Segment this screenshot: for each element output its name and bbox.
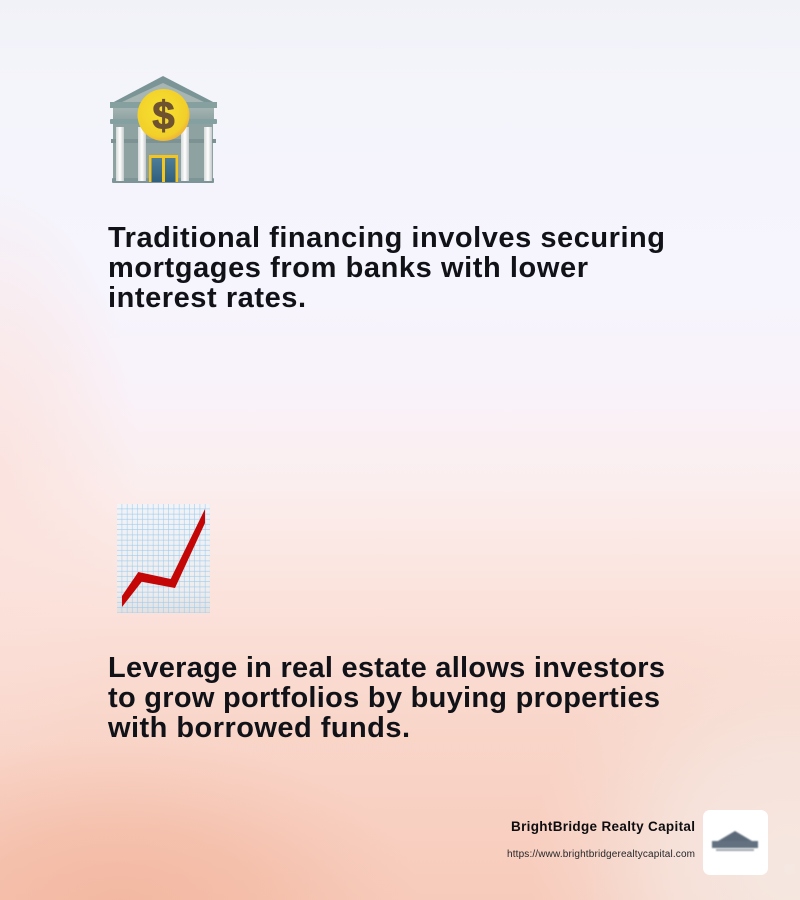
company url: https://www.brightbridgerealtycapital.com: [507, 849, 695, 860]
company logo tile: [703, 810, 768, 875]
bank door: [149, 155, 178, 182]
heading: leverage statement: [107, 652, 665, 744]
icon: bank building with dollar coin: [110, 76, 217, 183]
bank columns: [116, 127, 212, 181]
icon: chart with rising red line: [117, 504, 210, 613]
company name: BrightBridge Realty Capital: [511, 819, 695, 834]
heading: leverage statement: to grow portfolios by buying properties: [108, 682, 660, 714]
bank roof pediment: [110, 76, 217, 108]
footer: company brand: [507, 810, 768, 875]
heading: leverage statement: Leverage in real estate allows investors: [108, 652, 665, 684]
dollar coin: $: [152, 94, 175, 138]
heading: traditional financing statement: [108, 222, 665, 314]
rising red line: [122, 509, 205, 607]
heading: traditional financing statement: interest rates.: [108, 282, 306, 314]
heading: leverage statement: with borrowed funds.: [107, 712, 410, 744]
heading: traditional financing statement: mortgages from banks with lower: [108, 252, 588, 284]
graph paper: [117, 504, 210, 613]
heading: traditional financing statement: Traditional financing involves securing: [108, 222, 665, 254]
bank facade: [110, 108, 217, 183]
